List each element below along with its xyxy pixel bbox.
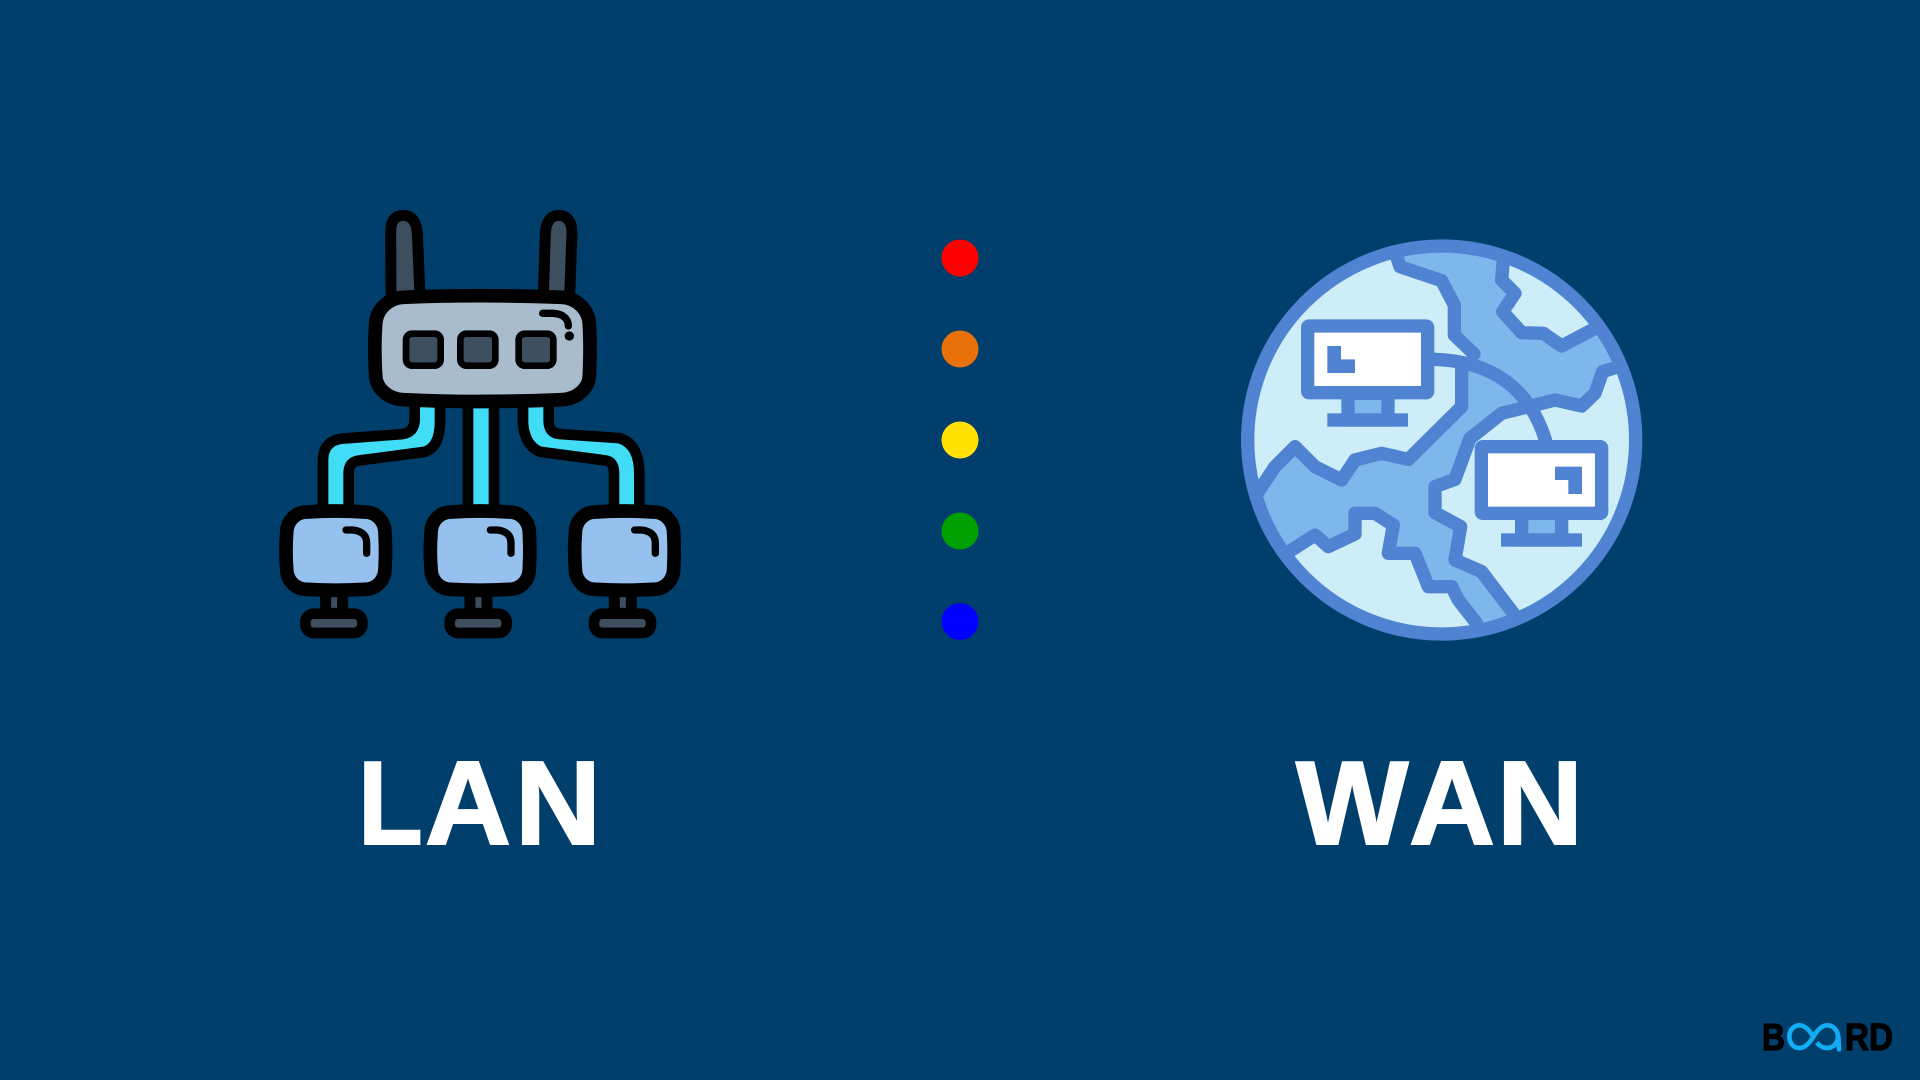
logo letter B: B <box>1762 1017 1785 1059</box>
network arc linking computers <box>1433 359 1546 442</box>
computer upper left <box>1308 326 1428 427</box>
computer centre <box>430 511 530 633</box>
logo infinity symbol <box>1789 1025 1839 1049</box>
router body <box>375 296 590 401</box>
label: LAN: AN <box>425 737 601 870</box>
router antennas <box>391 215 572 297</box>
globe land disc <box>1248 246 1636 634</box>
infographic canvas <box>279 210 1892 1052</box>
computer right <box>575 511 674 633</box>
router highlight <box>543 313 574 341</box>
network cables <box>328 403 634 507</box>
computer lower right <box>1481 447 1602 547</box>
coloured dots column <box>942 240 978 640</box>
label: LAN: L <box>358 736 423 869</box>
icon: WAN globe with two connected computers <box>1240 230 1640 650</box>
label: WAN: WAN <box>1296 737 1583 870</box>
logo letters RD: RD <box>1845 1017 1893 1059</box>
continent coastlines <box>1258 257 1618 623</box>
icon: LAN router with three connected computers <box>286 215 674 633</box>
globe ocean <box>1263 252 1612 622</box>
logo: BOARD <box>1762 1017 1893 1059</box>
router ports <box>406 334 553 366</box>
computer left <box>286 511 385 633</box>
globe outline <box>1248 246 1636 634</box>
